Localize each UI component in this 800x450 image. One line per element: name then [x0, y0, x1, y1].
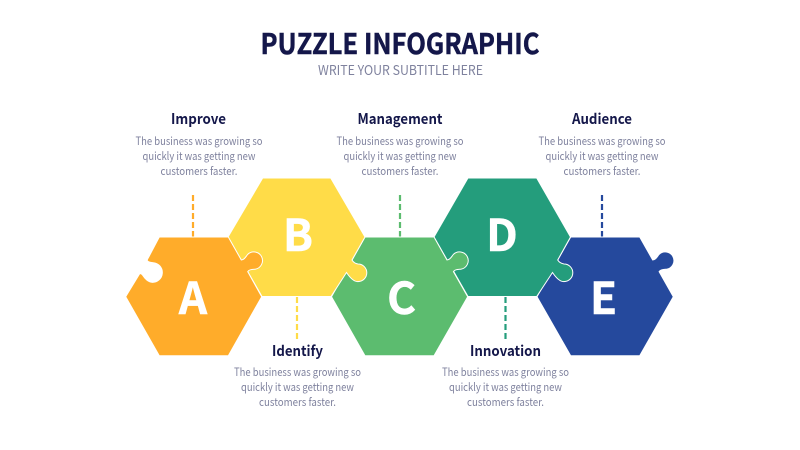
text block: Identify: The business was growing so	[234, 364, 361, 380]
text block: Identify: customers faster.	[259, 394, 336, 410]
text block: Innovation	[442, 340, 569, 410]
subtitle: WRITE YOUR SUBTITLE HERE	[318, 60, 483, 79]
letter E: E	[590, 263, 617, 327]
letter C: C	[387, 263, 416, 327]
puzzle piece: C	[332, 237, 468, 356]
text block: Identify: Identify	[272, 340, 324, 361]
text block: Innovation: The business was growing so	[442, 364, 569, 380]
text block: Audience: Audience	[571, 108, 632, 129]
connector: A	[192, 195, 194, 237]
connector: E	[601, 195, 603, 237]
connector: D	[504, 297, 507, 339]
text block: Improve	[136, 108, 263, 179]
connector: B	[296, 297, 298, 339]
puzzle piece: A	[126, 237, 263, 356]
puzzle piece: E	[537, 237, 674, 356]
text block: Identify	[234, 340, 361, 410]
text block: Identify: quickly it was getting new	[241, 379, 354, 395]
text block: Improve: Improve	[171, 108, 226, 129]
text block: Audience	[538, 108, 666, 179]
text block: Management: Management	[358, 108, 442, 129]
letter D: D	[486, 200, 518, 264]
text block: Innovation: quickly it was getting new	[449, 379, 562, 395]
text block: Management: quickly it was getting new	[344, 148, 457, 164]
puzzle piece: D	[434, 178, 573, 296]
title: PUZZLE INFOGRAPHIC	[260, 22, 540, 63]
connector: C	[399, 195, 401, 237]
text block: Innovation: Innovation	[470, 340, 541, 361]
text block: Audience: quickly it was getting new	[546, 148, 659, 164]
text block: Audience: customers faster.	[564, 163, 640, 179]
letter A: A	[178, 263, 208, 327]
text block: Improve: quickly it was getting new	[142, 148, 256, 164]
text block: Management	[336, 108, 464, 179]
text block: Management: The business was growing so	[336, 133, 464, 149]
puzzle piece: B	[228, 178, 367, 296]
text block: Improve: The business was growing so	[136, 133, 263, 149]
text block: Innovation: customers faster.	[467, 394, 544, 410]
letter B: B	[283, 200, 313, 264]
text block: Management: customers faster.	[362, 163, 438, 179]
text block: Improve: customers faster.	[160, 163, 238, 179]
text block: Audience: The business was growing so	[538, 133, 666, 149]
